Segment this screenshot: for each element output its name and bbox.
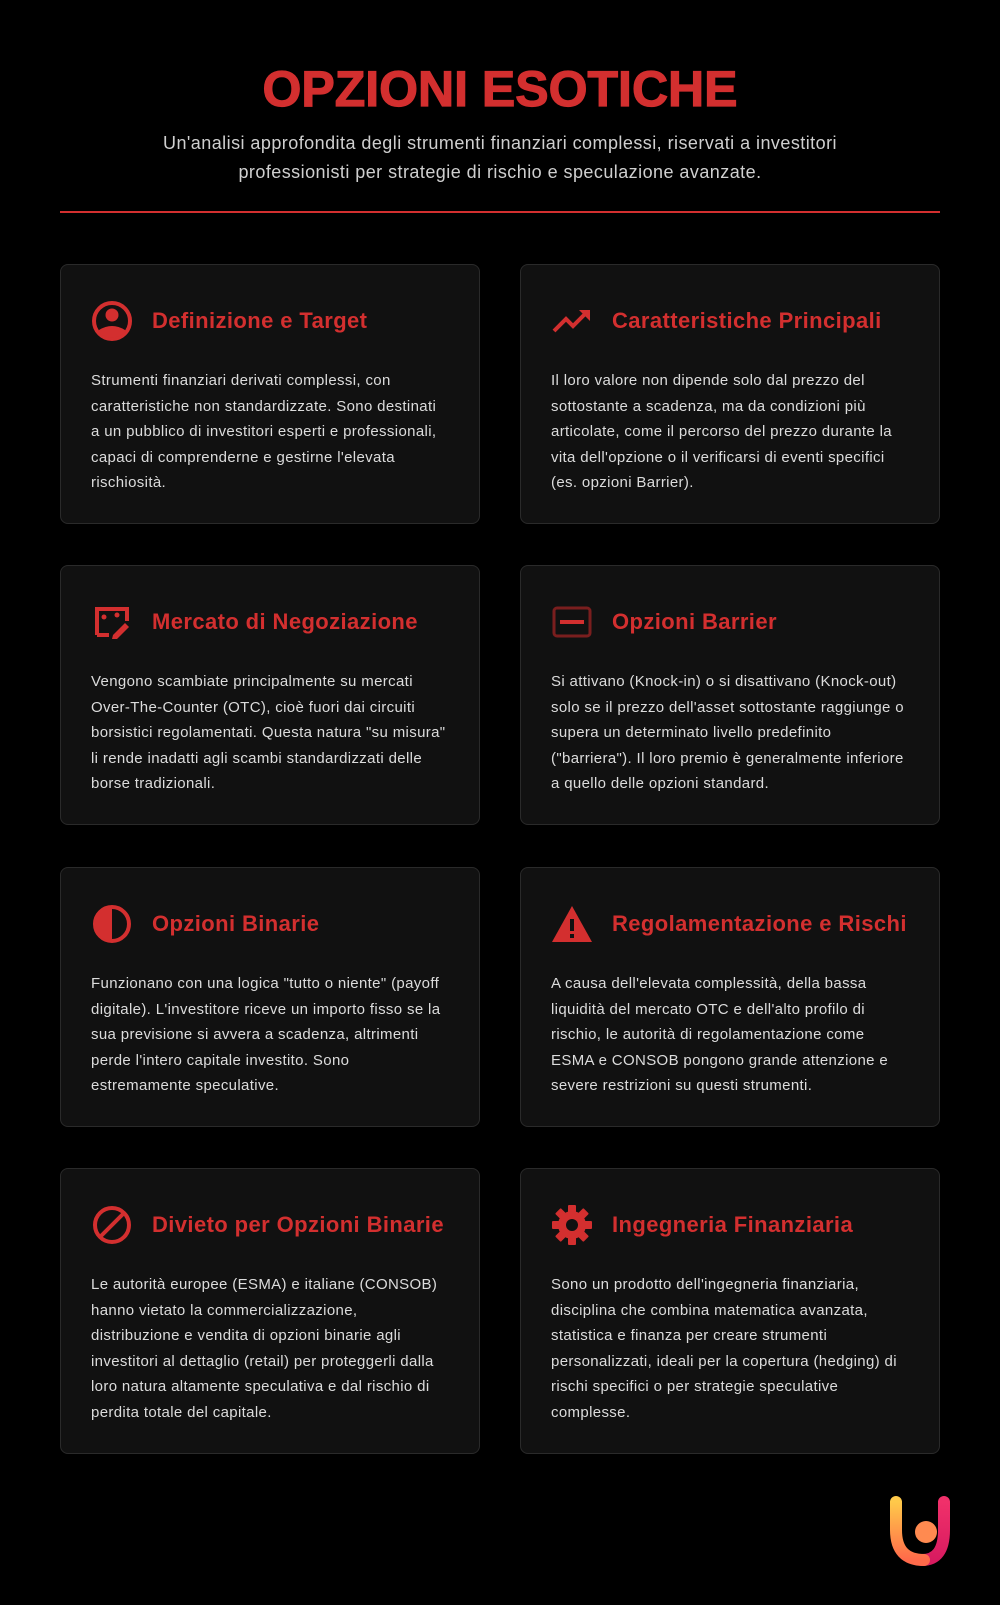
heading: divieto: Divieto per Opzioni Binarie <box>152 1212 444 1237</box>
heading: ingegneria <box>552 1205 853 1245</box>
heading: definizione <box>92 301 367 341</box>
title: OPZIONI ESOTICHE <box>262 61 738 117</box>
panel: binarie <box>60 867 480 1127</box>
panel: ingegneria <box>520 1168 940 1454</box>
panel: mercato <box>60 565 480 825</box>
heading: mercato <box>95 607 418 639</box>
panel: caratteristiche <box>520 264 940 524</box>
text: Le autorità europee (ESMA) e italiane (CONSOB) hanno vietato la commercializzazione, distribuzione e vendita di opzioni binarie agli investitori al dettaglio (retail) per proteggerli dalla loro natura altamente speculativa e dal rischio di perdita totale del capitale. <box>91 1276 437 1421</box>
text: Sono un prodotto dell'ingegneria finanziaria, disciplina che combina matematica avanzata, statistica e finanza per creare strumenti personalizzati, ideali per la copertura (hedging) di rischi specifici o per strategie speculative complesse. <box>551 1276 897 1421</box>
panel: definizione <box>60 264 480 524</box>
heading: mercato: Mercato di Negoziazione <box>152 609 418 634</box>
text: Funzionano con una logica "tutto o niente" (payoff digitale). L'investitore riceve un importo fisso se la sua previsione si avvera a scadenza, altrimenti perde l'intero capitale investito. Sono estremamente speculative. <box>91 975 440 1094</box>
text: Strumenti finanziari derivati complessi, con caratteristiche non standardizzate. Sono destinati a un pubblico di investitori esperti e professionali, capaci di comprenderne e gestirne l'elevata rischiosità. <box>91 372 436 491</box>
subtitle: Un'analisi approfondita degli strumenti finanziari complessi, riservati a investitori professionisti per strategie di rischio e speculazione avanzate. <box>163 133 837 182</box>
text: Vengono scambiate principalmente su mercati Over-The-Counter (OTC), cioè fuori dai circuiti borsistici regolamentati. Questa natura "su misura" li rende inadatti agli scambi standardizzati delle borse tradizionali. <box>91 673 445 792</box>
text: Si attivano (Knock-in) o si disattivano (Knock-out) solo se il prezzo dell'asset sottostante raggiunge o supera un determinato livello predefinito ("barriera"). Il loro premio è generalmente inferiore a quello delle opzioni standard. <box>551 673 904 792</box>
heading: definizione: Definizione e Target <box>152 308 367 333</box>
heading: regolamentazione <box>552 906 907 942</box>
panel: divieto <box>60 1168 480 1454</box>
heading: regolamentazione: Regolamentazione e Rischi <box>612 911 907 936</box>
heading: barrier: Opzioni Barrier <box>612 609 777 634</box>
logo <box>890 1496 950 1566</box>
heading: ingegneria: Ingegneria Finanziaria <box>612 1212 853 1237</box>
heading: divieto <box>93 1206 444 1244</box>
panel: barrier <box>520 565 940 825</box>
text: A causa dell'elevata complessità, della bassa liquidità del mercato OTC e dell'alto profilo di rischio, le autorità di regolamentazione come ESMA e CONSOB pongono grande attenzione e severe restrizioni su questi strumenti. <box>551 975 888 1094</box>
heading: binarie <box>93 905 319 943</box>
heading: binarie: Opzioni Binarie <box>152 911 319 936</box>
text: Il loro valore non dipende solo dal prezzo del sottostante a scadenza, ma da condizioni più articolate, come il percorso del prezzo durante la vita dell'opzione o il verificarsi di eventi specifici (es. opzioni Barrier). <box>551 372 892 491</box>
heading: barrier <box>552 606 777 638</box>
heading: caratteristiche: Caratteristiche Principali <box>612 308 882 333</box>
panel: regolamentazione <box>520 867 940 1127</box>
